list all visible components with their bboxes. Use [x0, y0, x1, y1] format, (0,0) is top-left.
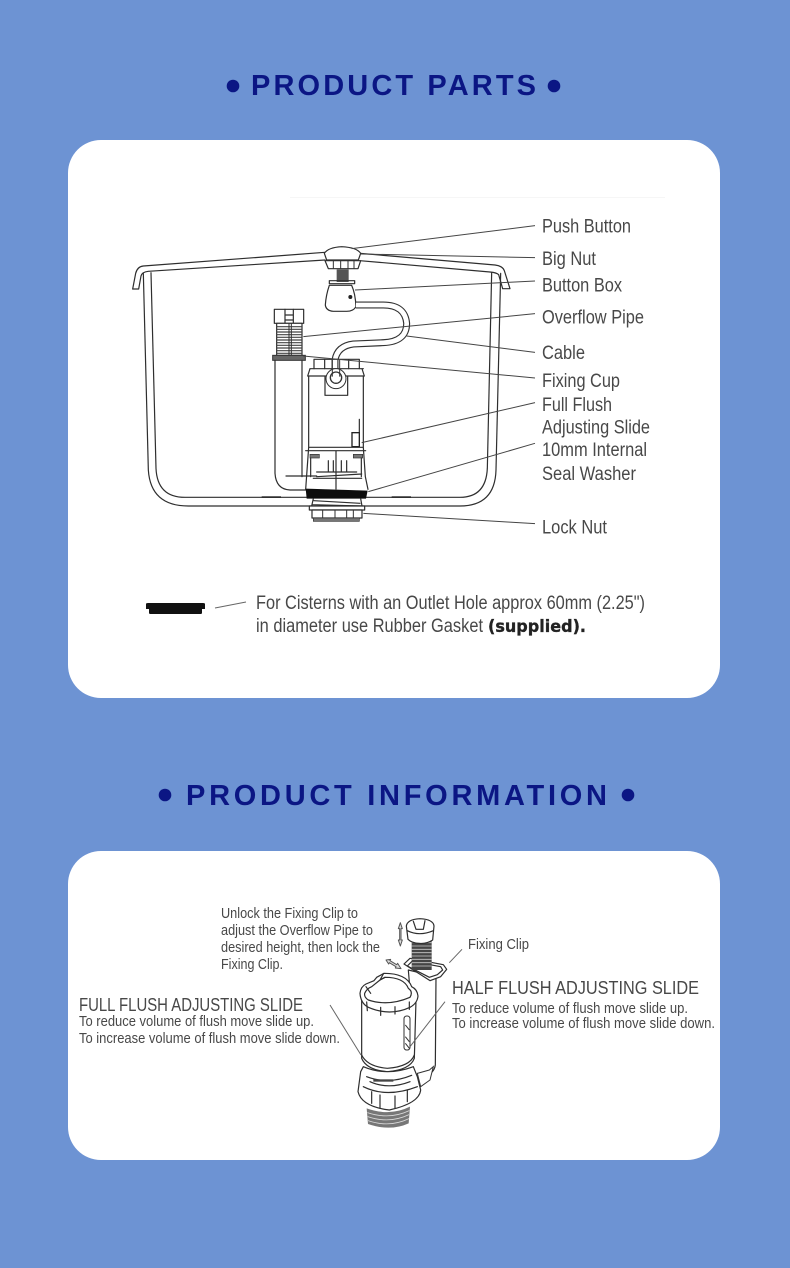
- fixing clip: [404, 958, 447, 981]
- cable: [335, 305, 407, 378]
- icon: rubber gasket: [146, 602, 246, 614]
- full flush adjusting slide text: To increase volume of flush move slide down.: [79, 1030, 340, 1047]
- cistern body: [143, 273, 501, 506]
- leader lines: [330, 949, 462, 1055]
- overflow pipe body: [402, 970, 436, 1082]
- fixing clip instruction: Fixing Clip.: [221, 957, 283, 973]
- part labels: 10mm Internal: [542, 440, 647, 461]
- slide arrow: [386, 959, 401, 969]
- part labels: Big Nut: [542, 249, 597, 270]
- valve barrel: [362, 1000, 416, 1072]
- fixing clip instruction: adjust the Overflow Pipe to: [221, 923, 373, 939]
- full flush adjusting slide text: [79, 995, 340, 1047]
- part labels: Fixing Cup: [542, 371, 620, 392]
- heading: product parts: PRODUCT PARTS: [251, 70, 536, 102]
- gasket note: [256, 593, 645, 637]
- leader lines: [303, 226, 535, 524]
- panel: product parts: [68, 140, 720, 698]
- heading: product information: PRODUCT INFORMATION: [186, 780, 607, 812]
- gasket note: For Cisterns with an Outlet Hole approx 60mm (2.25"): [256, 593, 645, 614]
- part labels: Lock Nut: [542, 518, 608, 538]
- full flush adjusting slide text: FULL FLUSH ADJUSTING SLIDE: [79, 995, 303, 1015]
- half flush adjusting slide text: [452, 978, 715, 1032]
- part labels: [542, 216, 650, 538]
- part labels: Overflow Pipe: [542, 308, 644, 328]
- threaded outlet: [367, 1107, 410, 1128]
- half flush adjusting slide text: HALF FLUSH ADJUSTING SLIDE: [452, 978, 699, 998]
- fixing clip instruction: [221, 906, 380, 973]
- overflow pipe: [273, 309, 317, 490]
- part labels: Cable: [542, 343, 585, 364]
- half flush adjusting slide text: To reduce volume of flush move slide up.: [452, 1000, 688, 1017]
- gasket note: in diameter use Rubber Gasket: [256, 616, 484, 637]
- push button: [324, 247, 361, 284]
- lower valve: [306, 447, 368, 489]
- label: fixing clip: Fixing Clip: [468, 936, 529, 953]
- height arrow: [398, 923, 402, 946]
- valve body with fixing cup: [308, 359, 364, 447]
- part labels: Seal Washer: [542, 464, 637, 485]
- adjusting slide: [352, 419, 359, 447]
- cistern lid: [133, 252, 510, 289]
- part labels: Button Box: [542, 276, 622, 296]
- adjusting slide: [404, 1016, 410, 1050]
- button box: [325, 285, 356, 311]
- seal washer: [306, 489, 368, 499]
- half flush adjusting slide text: To increase volume of flush move slide down.: [452, 1015, 715, 1032]
- part labels: Adjusting Slide: [542, 418, 650, 438]
- full flush adjusting slide text: To reduce volume of flush move slide up.: [79, 1013, 314, 1030]
- part labels: Push Button: [542, 216, 631, 238]
- diagram: flush valve: [330, 919, 462, 1128]
- fixing clip instruction: desired height, then lock the: [221, 940, 380, 956]
- valve cap: [360, 973, 418, 1015]
- part labels: Full Flush: [542, 395, 612, 416]
- diagram: cistern cross-section: [133, 226, 535, 524]
- fixing clip instruction: Unlock the Fixing Clip to: [221, 906, 358, 922]
- panel: product information: [68, 851, 720, 1160]
- threaded pipe: [406, 919, 434, 970]
- valve base: [358, 1067, 433, 1110]
- gasket note: (supplied).: [488, 617, 586, 637]
- lock nut: [309, 499, 365, 521]
